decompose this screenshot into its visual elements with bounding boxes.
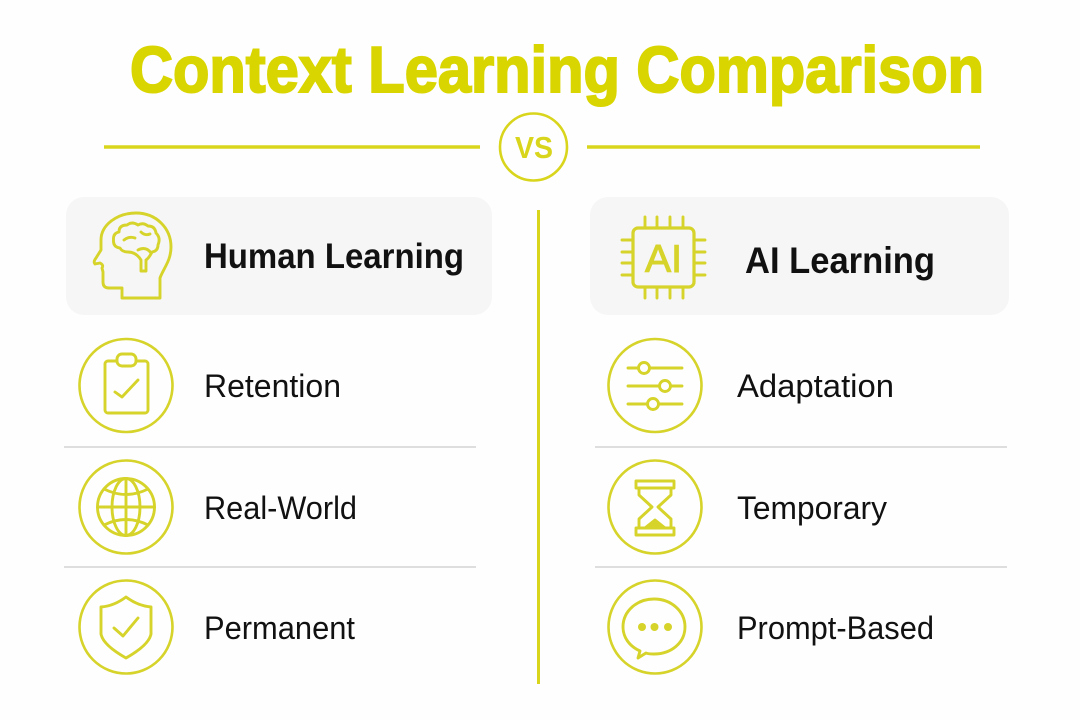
- icon: globe: [80, 460, 172, 554]
- label: retention: Retention: [204, 368, 341, 404]
- icon: clipboard check: [80, 339, 172, 432]
- centre divider: [537, 210, 540, 684]
- title: Context Learning Comparison: [130, 33, 984, 106]
- label: temporary: Temporary: [737, 490, 887, 526]
- row: prompt-based: [608, 580, 934, 674]
- label: adaptation: Adaptation: [737, 368, 894, 404]
- icon: shield check: [80, 580, 172, 674]
- row: retention: [80, 339, 341, 432]
- label: real-world: Real-World: [204, 490, 357, 526]
- vs divider: VS: [515, 130, 553, 165]
- icon: ai chip: [622, 217, 705, 298]
- row: real-world: [80, 460, 357, 554]
- vs divider: [104, 114, 980, 180]
- label: prompt-based: Prompt-Based: [737, 610, 934, 646]
- heading: human learning: Human Learning: [204, 237, 464, 276]
- icon: speech bubble: [608, 580, 702, 674]
- panel: ai learning: [590, 197, 1009, 315]
- heading: ai learning: AI Learning: [745, 240, 935, 281]
- icon: ai chip: AI: [645, 238, 682, 281]
- row: permanent: [80, 580, 355, 674]
- row: temporary: [608, 460, 887, 554]
- icon: hourglass: [608, 460, 702, 554]
- panel: human learning: [66, 197, 492, 315]
- icon: head with brain: [94, 213, 171, 298]
- row: adaptation: [608, 339, 894, 432]
- icon: sliders: [608, 339, 702, 432]
- label: permanent: Permanent: [204, 610, 355, 646]
